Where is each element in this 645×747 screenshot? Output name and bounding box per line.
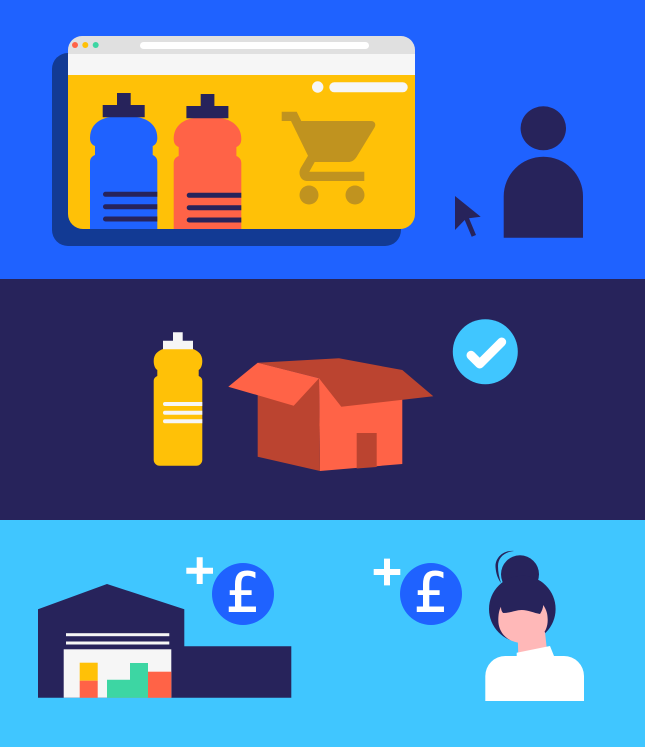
bottle: yellow xyxy=(154,332,202,466)
icon: plus one xyxy=(186,557,213,584)
icon: pound coin one xyxy=(212,562,274,625)
icon: cursor arrow xyxy=(455,196,481,237)
icon: open box xyxy=(228,358,433,471)
bottle: red xyxy=(174,94,241,229)
icon: pound coin one: £ xyxy=(226,562,260,624)
panel: packing order xyxy=(0,279,645,520)
panel: added costs xyxy=(0,520,645,747)
icon: pound coin two: £ xyxy=(414,562,448,624)
bottle: blue xyxy=(90,93,157,229)
icon: pound coin two xyxy=(400,562,462,625)
browser shadow xyxy=(52,53,401,246)
icon: customer xyxy=(504,106,583,238)
icon: warehouse xyxy=(38,584,291,698)
browser window xyxy=(68,36,415,229)
icon: woman xyxy=(485,551,584,701)
icon: plus two xyxy=(374,559,400,585)
icon: shopping cart xyxy=(282,112,375,204)
panel: online shop xyxy=(0,0,645,279)
icon: check badge xyxy=(453,319,518,384)
